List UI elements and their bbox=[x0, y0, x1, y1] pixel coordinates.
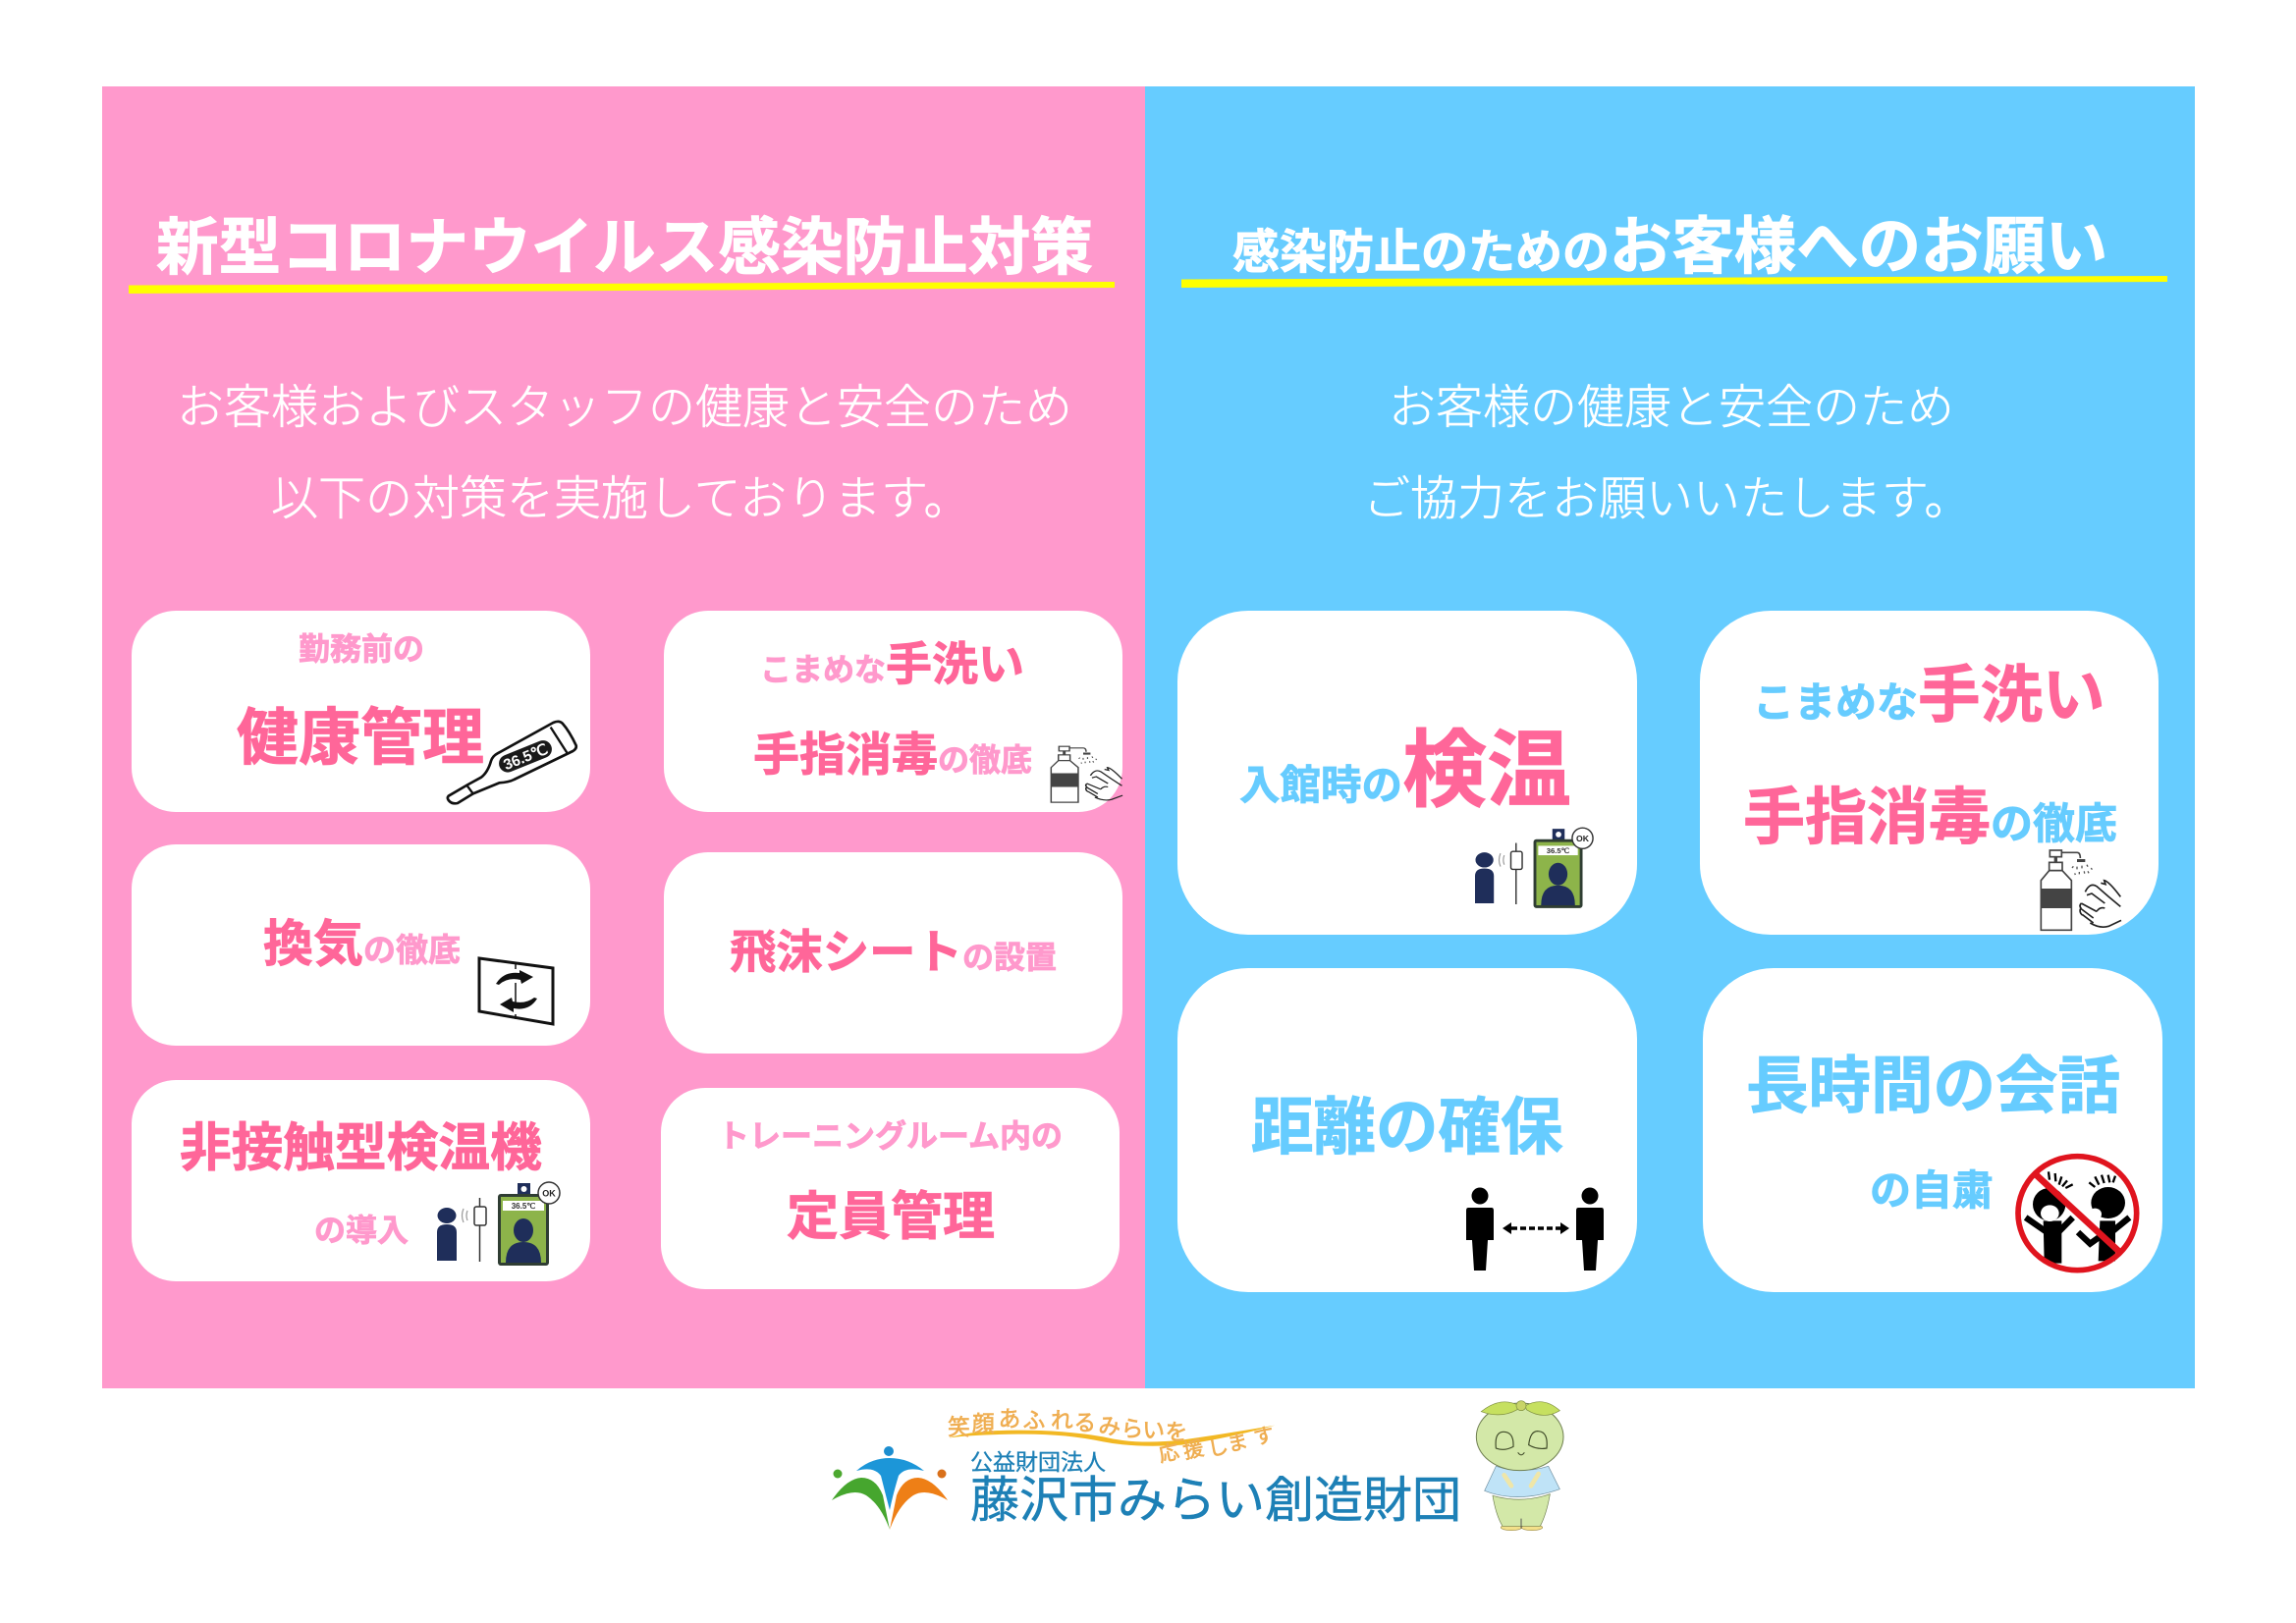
card: training room capacity bbox=[661, 1088, 1120, 1289]
card: keep distance bbox=[1177, 968, 1637, 1292]
icon: two people with distance arrow bbox=[1466, 1188, 1604, 1271]
heading underline left bbox=[129, 282, 1115, 294]
lead text: left line 1: お客様およびスタッフの健康と安全のため bbox=[177, 382, 1072, 434]
icon: temperature scanner: 36.5℃ bbox=[512, 1202, 535, 1211]
slogan swoosh and lettering: 応援します bbox=[1157, 1424, 1277, 1467]
slogan swoosh and lettering: 笑顔あふれるみらいを bbox=[948, 1406, 1187, 1444]
card: droplet sheet bbox=[664, 852, 1122, 1054]
text: frequent hand washing: こまめな手洗い bbox=[760, 638, 1024, 690]
text: frequent hand washing: こまめな手洗い bbox=[1753, 662, 2105, 730]
icon: temperature scanner: OK bbox=[542, 1188, 556, 1198]
panel: infection control measures bbox=[102, 86, 1145, 1388]
heading: infection control measures: 新型コロナウイルス感染防止対策 bbox=[156, 213, 1093, 283]
text: refrain: の自粛 bbox=[1870, 1167, 1994, 1214]
card: temperature check at entry bbox=[1177, 611, 1637, 935]
icon: temperature scanner: 36.5℃ bbox=[1547, 846, 1570, 855]
icon: window with airflow arrows bbox=[477, 956, 554, 1026]
footer logo: Fujisawa Mirai Sozo Foundation bbox=[832, 1400, 1563, 1531]
text: temperature check on entry: 入館時の検温 bbox=[1239, 724, 1571, 818]
icon: sanitizer bottle and hands bbox=[1051, 746, 1123, 803]
card: contactless thermometer bbox=[132, 1080, 590, 1281]
card: customer hand washing bbox=[1700, 611, 2159, 935]
card: hand washing and disinfection bbox=[664, 611, 1122, 812]
text: in the training room: トレーニングルーム内の bbox=[718, 1118, 1063, 1154]
heading: requests to customers: 感染防止のためのお客様へのお願い bbox=[1232, 213, 2107, 282]
text: long conversations: 長時間の会話 bbox=[1746, 1053, 2120, 1121]
lead text: right line 2: ご協力をお願いいたします。 bbox=[1363, 473, 1971, 525]
text: thorough ventilation: 換気の徹底 bbox=[263, 916, 461, 972]
lead text: right line 1: お客様の健康と安全のため bbox=[1389, 382, 1954, 434]
icon: no talking sign bbox=[2015, 1153, 2139, 1272]
logo mark bbox=[832, 1446, 948, 1530]
heading underline right bbox=[1181, 276, 2167, 288]
card: refrain from long conversations bbox=[1703, 968, 2162, 1292]
slogan swoosh and lettering bbox=[948, 1406, 1277, 1467]
icon: temperature scanner: OK bbox=[1576, 834, 1590, 843]
text: introduction: の導入 bbox=[314, 1213, 409, 1248]
text: capacity management: 定員管理 bbox=[787, 1188, 995, 1246]
text: before work: 勤務前の bbox=[299, 631, 424, 667]
organization name: 藤沢市みらい創造財団 bbox=[970, 1473, 1461, 1528]
text: thorough hand disinfection: 手指消毒の徹底 bbox=[1743, 784, 2117, 852]
card: ventilation bbox=[132, 844, 590, 1046]
text: maintain distance: 距離の確保 bbox=[1251, 1094, 1563, 1163]
icon: thermometer bbox=[446, 721, 577, 805]
text: contactless temperature scanner: 非接触型検温機 bbox=[180, 1119, 542, 1177]
lead text: left line 2: 以下の対策を実施しております。 bbox=[271, 473, 970, 525]
card: health management bbox=[132, 611, 590, 812]
icon: sanitizer bottle and hands bbox=[2041, 849, 2121, 931]
text: health management: 健康管理 bbox=[237, 704, 484, 773]
icon: temperature scanner bbox=[437, 1181, 561, 1266]
text: installing droplet shields: 飛沫シートの設置 bbox=[730, 927, 1057, 979]
mascot character bbox=[1475, 1400, 1563, 1531]
panel: requests to customers bbox=[1145, 86, 2195, 1388]
icon: thermometer: 36.5℃ bbox=[501, 741, 550, 774]
organization type: 公益財団法人 bbox=[970, 1449, 1106, 1475]
icon: temperature scanner bbox=[1475, 827, 1594, 908]
text: thorough hand disinfection: 手指消毒の徹底 bbox=[753, 729, 1032, 781]
